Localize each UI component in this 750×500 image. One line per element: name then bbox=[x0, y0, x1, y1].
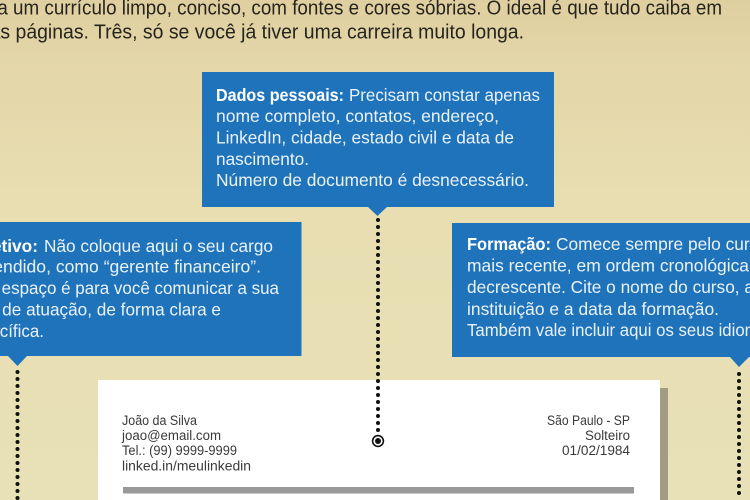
callout: formação: mais recente, em ordem cronológica bbox=[467, 256, 749, 276]
résumé sheet bbox=[98, 380, 668, 500]
callout: dados pessoais: Precisam constar apenas bbox=[349, 85, 540, 105]
callout: dados pessoais: Número de documento é desnecessário. bbox=[216, 170, 529, 190]
callout: objetivo bbox=[0, 222, 302, 366]
callout: formação bbox=[452, 223, 750, 367]
callout: formação: instituição e a data da formação. bbox=[467, 299, 719, 319]
callout: dados pessoais: Dados pessoais: bbox=[216, 85, 344, 105]
contact details: linked.in/meulinkedin bbox=[122, 458, 251, 474]
divider bar bbox=[123, 487, 634, 494]
personal details: Solteiro bbox=[585, 428, 630, 443]
callout: dados pessoais: LinkedIn, cidade, estado civil e data de bbox=[216, 128, 514, 148]
personal details: São Paulo - SP bbox=[547, 413, 630, 428]
contact details: Tel.: (99) 9999-9999 bbox=[122, 443, 237, 458]
connector: dados pessoais bbox=[373, 220, 383, 446]
contact details bbox=[121, 413, 251, 474]
intro text bbox=[0, 0, 722, 44]
icon: target marker bbox=[373, 436, 383, 446]
connector: formação bbox=[737, 374, 741, 500]
callout: formação: decrescente. Cite o nome do curso, a bbox=[467, 277, 750, 297]
personal details: 01/02/1984 bbox=[562, 443, 630, 458]
connector: objetivo bbox=[16, 372, 20, 500]
contact details: João da Silva bbox=[122, 413, 197, 428]
callout: dados pessoais: nascimento. bbox=[216, 149, 309, 169]
callout: dados pessoais: nome completo, contatos, endereço, bbox=[216, 106, 499, 126]
contact details: joao@email.com bbox=[121, 428, 221, 443]
personal details bbox=[547, 413, 630, 458]
callout: formação: Formação: bbox=[467, 234, 551, 254]
callout: objetivo: Não coloque aqui o seu cargo bbox=[44, 236, 273, 256]
callout: dados pessoais bbox=[202, 72, 554, 216]
